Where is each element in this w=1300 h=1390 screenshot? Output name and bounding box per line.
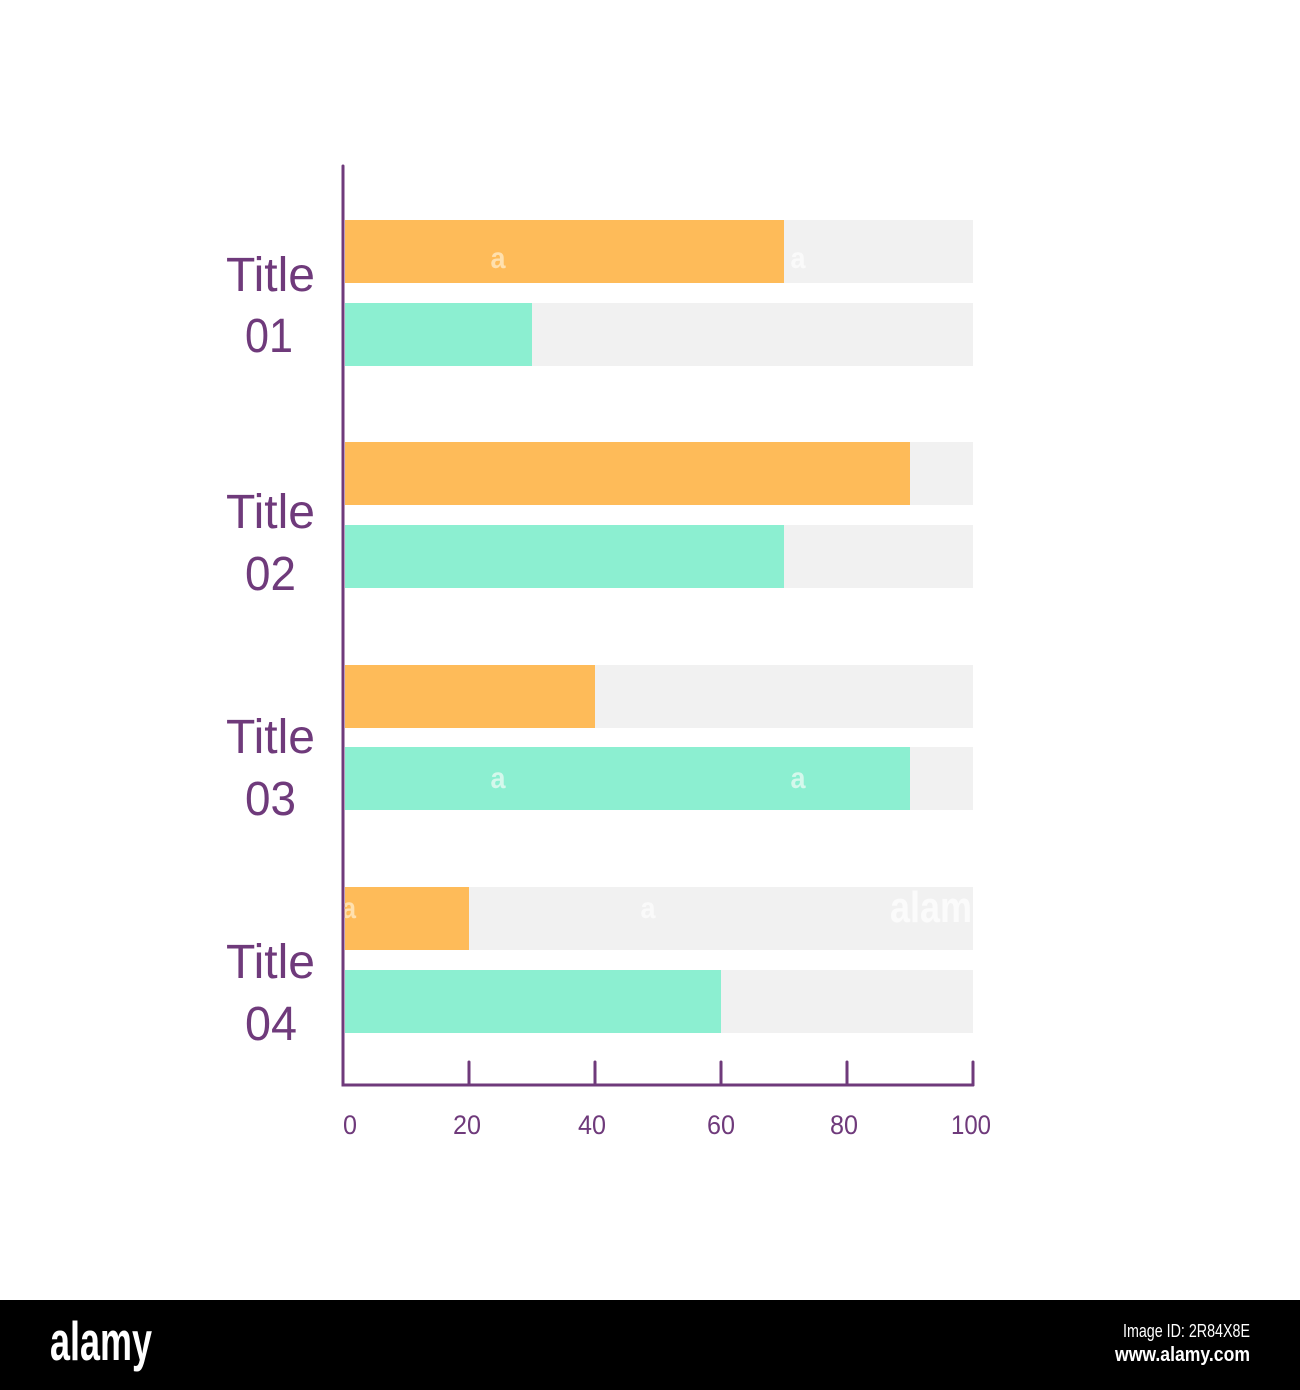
label: Title 03: Title [226,711,315,764]
label: Title 01 [226,249,315,363]
watermark marks over bars: a [490,762,506,795]
bar track: group 04 lower [345,970,973,1033]
x-axis value labels: 0 [343,1110,357,1140]
bar: group 02 orange, value 90 [345,442,910,505]
label: Title 03 [226,711,315,826]
label: Title 02: 02 [245,548,296,601]
bar track: group 02 upper [345,442,973,505]
x-axis value labels: 100 [951,1110,991,1140]
bar track: group 03 lower [345,747,973,810]
watermark marks over bars [342,242,972,932]
bar: group 04 orange, value 20 [345,887,469,950]
footer website: www.alamy.com [1114,1344,1250,1366]
bar track: group 04 upper [345,887,973,950]
bar track: group 01 lower [345,303,973,366]
x-axis value labels: 40 [578,1110,606,1140]
label: Title 04: Title [226,936,315,989]
watermark marks over bars: a [640,892,656,925]
watermark marks over bars: alam [890,883,972,932]
footer bar [0,1300,1300,1390]
watermark marks over bars: a [490,242,506,275]
axes and tick marks [343,166,973,1085]
bar: group 02 teal, value 70 [345,525,784,588]
bar track: group 01 upper [345,220,973,283]
bar: group 03 teal, value 90 [345,747,910,810]
panel: group 03 bars [345,665,973,810]
label: Title 04: 04 [245,998,297,1051]
panel: group 04 bars [345,887,973,1033]
label: Title 04 [226,936,315,1051]
bar: group 03 orange, value 40 [345,665,595,728]
label: Title 01: 01 [245,310,293,363]
footer logo: alamy [50,1310,152,1372]
bar: group 01 orange, value 70 [345,220,784,283]
watermark marks over bars: a [790,762,806,795]
label: Title 03: 03 [245,773,296,826]
category labels [226,249,315,1051]
x-axis value labels: 80 [830,1110,858,1140]
label: Title 01: Title [226,249,315,302]
footer image id: Image ID: 2R84X8E [1123,1321,1250,1341]
x-axis value labels: 20 [453,1110,481,1140]
label: Title 02: Title [226,486,315,539]
watermark marks over bars: a [342,892,356,925]
label: Title 02 [226,486,315,601]
panel: group 01 bars [345,220,973,366]
x-axis value labels [343,1110,991,1140]
bar track: group 03 upper [345,665,973,728]
bar: group 04 teal, value 60 [345,970,721,1033]
panel: group 02 bars [345,442,973,588]
bar track: group 02 lower [345,525,973,588]
watermark marks over bars: a [790,242,806,275]
bar: group 01 teal, value 30 [345,303,532,366]
x-axis value labels: 60 [707,1110,735,1140]
